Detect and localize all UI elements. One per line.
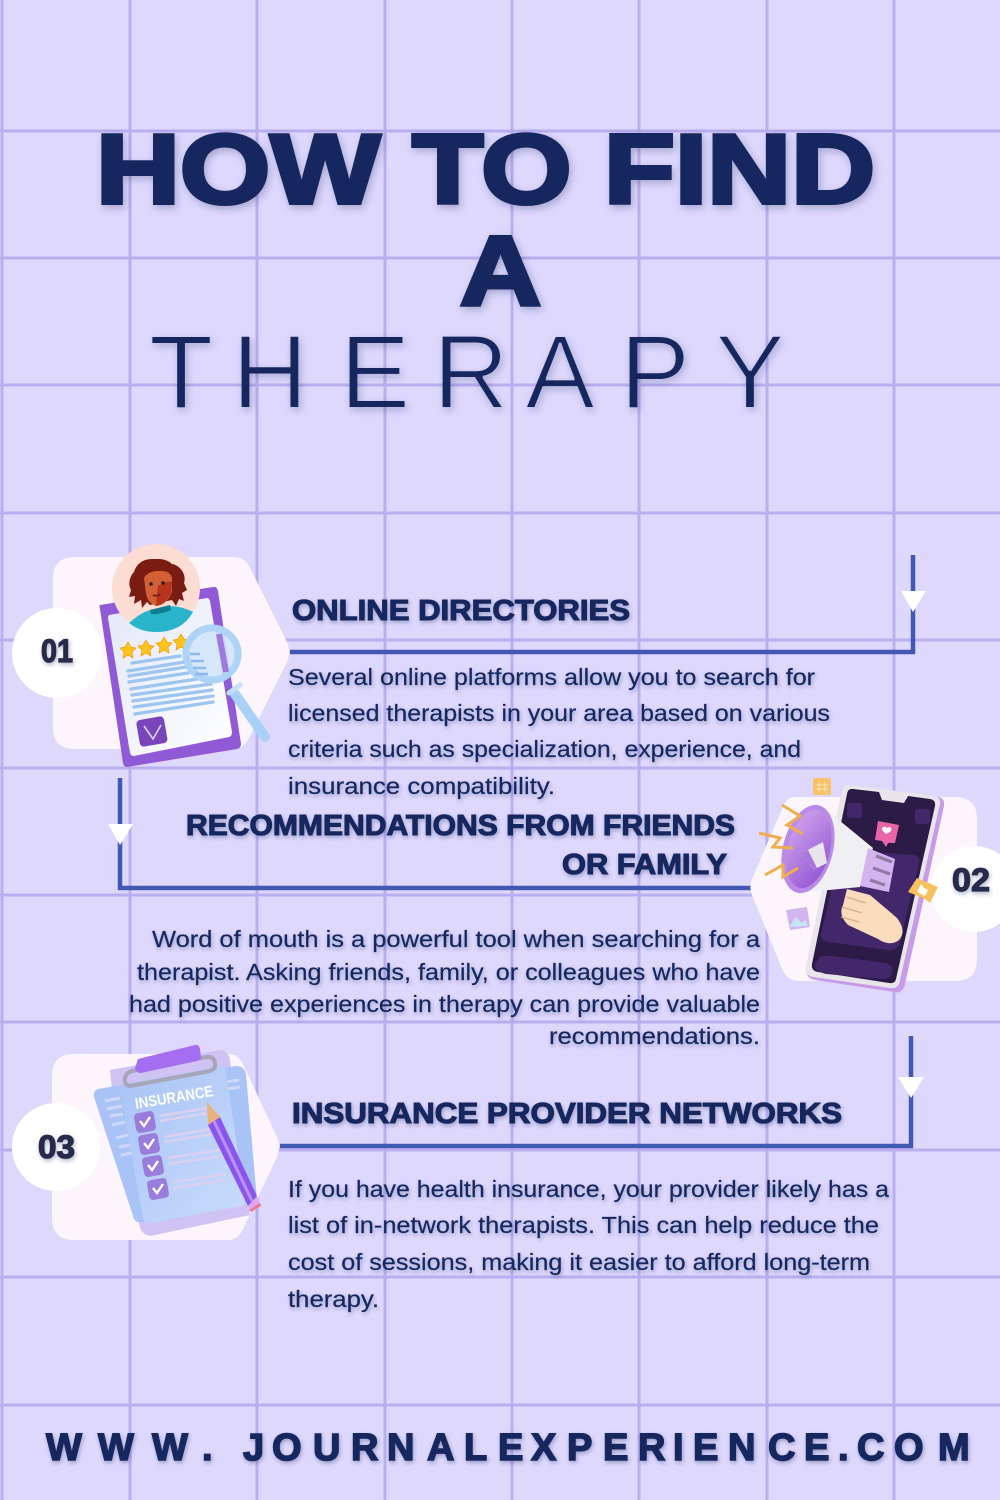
text block: insurance: list of in-network therapists. This can help reduce the — [288, 1212, 879, 1238]
image badge — [786, 907, 810, 930]
number badge 01 — [12, 608, 102, 698]
review text lines — [128, 656, 213, 714]
megaphone — [773, 799, 895, 899]
number badge 03: 03 — [38, 1129, 75, 1165]
title: A — [460, 216, 541, 326]
text block: recommendations: therapist. Asking friends, family, or colleagues who have — [137, 959, 760, 985]
connector arrow: step 2 — [108, 778, 752, 888]
title — [96, 114, 875, 431]
connector arrow: step 3 — [280, 1036, 924, 1146]
text block: recommendations: recommendations. — [549, 1023, 760, 1049]
text block: online directories: Several online platforms allow you to search for — [288, 664, 815, 690]
pencil — [207, 1102, 261, 1212]
text block: online directories — [288, 664, 830, 799]
footer url: WWW. JOURNALEXPERIENCE.COM — [46, 1427, 970, 1469]
hashtag badge — [813, 778, 831, 795]
heading: recommendations from friends or family: OR FAMILY — [562, 849, 727, 881]
heading: online directories: ONLINE DIRECTORIES — [292, 595, 630, 627]
text block: insurance: If you have health insurance, your provider likely has a — [288, 1176, 890, 1202]
text block: insurance: therapy. — [288, 1286, 379, 1312]
rating stars — [120, 634, 189, 658]
panel: step 3 badge background — [52, 1054, 279, 1240]
panel: step 1 badge background — [53, 557, 289, 749]
avatar — [112, 544, 200, 632]
magnifier — [186, 628, 265, 737]
phone screen card — [821, 851, 919, 950]
text block: recommendations: had positive experiences in therapy can provide valuable — [129, 991, 760, 1017]
icon: insurance clipboard — [94, 1045, 261, 1236]
checklist — [133, 1108, 226, 1201]
text block: insurance — [288, 1176, 890, 1312]
heart badge — [875, 821, 899, 847]
number badge 01: 01 — [41, 633, 73, 669]
checkbox — [136, 716, 168, 747]
clip — [125, 1045, 215, 1086]
icon: phone with megaphone — [759, 778, 944, 992]
number badge 02 — [931, 846, 1000, 932]
sound lightning — [759, 805, 803, 877]
text block: online directories: insurance compatibility. — [288, 773, 555, 799]
title: HOW TO FIND — [96, 114, 875, 224]
insurance label: INSURANCE — [134, 1083, 215, 1113]
connector arrow: step 1 — [290, 555, 926, 652]
text block: recommendations: Word of mouth is a powerful tool when searching for a — [152, 926, 761, 952]
number badge 03 — [12, 1103, 100, 1191]
panel: step 2 badge background — [750, 797, 977, 981]
text block: online directories: criteria such as specialization, experience, and — [288, 736, 801, 762]
thumbs up badge — [908, 878, 938, 903]
heading: insurance provider networks: INSURANCE PROVIDER NETWORKS — [292, 1098, 842, 1130]
title: THERAPY — [149, 314, 785, 431]
text block: recommendations — [129, 926, 761, 1049]
heading: recommendations from friends or family — [186, 810, 735, 881]
heading: recommendations from friends or family: RECOMMENDATIONS FROM FRIENDS — [186, 810, 735, 842]
hand — [841, 889, 903, 943]
text block: insurance: cost of sessions, making it easier to afford long-term — [288, 1249, 870, 1275]
icon: clipboard with review and magnifier — [100, 544, 265, 767]
text block: online directories: licensed therapists in your area based on various — [288, 700, 830, 726]
number badge 02: 02 — [952, 862, 990, 898]
